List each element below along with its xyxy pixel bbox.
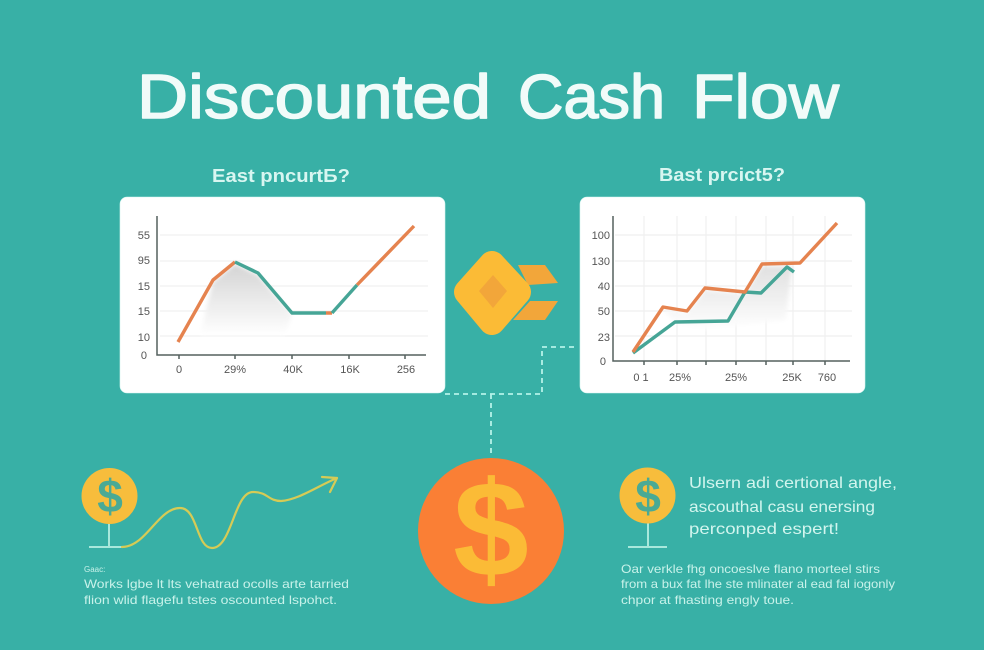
left text block: flion wlid flagefu tstes oscounted lspohct. xyxy=(84,593,337,607)
y axis labels: 50 xyxy=(598,306,610,318)
right callout text: ascouthal casu enersing xyxy=(689,499,875,516)
panel: right line chart xyxy=(580,197,865,393)
y axis labels: 15 xyxy=(138,306,150,318)
orange line xyxy=(633,223,837,352)
title xyxy=(137,63,839,132)
left text block: Works lgbe lt lts vehatrad ocolls arte tarried xyxy=(84,577,349,591)
growth arrow curve xyxy=(122,477,337,548)
y axis labels: 0 xyxy=(141,350,147,362)
chart axes xyxy=(613,216,850,365)
chart shading xyxy=(663,266,792,330)
y axis labels: 55 xyxy=(138,230,150,242)
icon: large dollar coin xyxy=(418,453,564,605)
x axis labels: 25K xyxy=(782,372,802,384)
dashed connector xyxy=(445,347,577,455)
y axis labels: 95 xyxy=(138,255,150,267)
y axis labels: 23 xyxy=(598,332,610,344)
x axis labels xyxy=(633,372,836,384)
icon: right dollar coin: $ xyxy=(635,470,661,522)
right text block: from a bux fat lhe ste mlinater al ead fal iogonly xyxy=(621,577,895,591)
x axis labels: 760 xyxy=(818,372,836,384)
x axis labels xyxy=(176,364,415,376)
x axis labels: 25% xyxy=(669,372,691,384)
title: Discounted xyxy=(137,63,491,132)
teal line xyxy=(633,267,794,353)
chart axes xyxy=(157,216,426,359)
orange line xyxy=(178,226,414,342)
x axis labels: 0 1 xyxy=(633,372,649,384)
icon: arrow diamond xyxy=(467,264,558,322)
right text block: chpor at fhasting engly toue. xyxy=(621,593,794,607)
icon: left dollar coin: $ xyxy=(97,470,123,522)
teal line xyxy=(235,262,357,313)
right callout text: perconped espert! xyxy=(689,521,839,538)
y axis labels: 15 xyxy=(138,281,150,293)
y axis labels xyxy=(592,230,610,368)
y axis labels: 10 xyxy=(138,332,150,344)
y axis labels: 100 xyxy=(592,230,610,242)
x axis labels: 256 xyxy=(397,364,415,376)
y axis labels: 0 xyxy=(600,356,606,368)
chart shading xyxy=(200,264,292,335)
left chart heading: East pncurtБ? xyxy=(212,166,350,186)
right text block xyxy=(621,562,895,607)
right text block: Oar verkle fhg oncoeslve flano morteel stirs xyxy=(621,562,880,576)
x axis labels: 29% xyxy=(224,364,246,376)
y axis labels: 40 xyxy=(598,281,610,293)
right callout text: Ulsern adi certional angle, xyxy=(689,475,897,492)
y axis labels: 130 xyxy=(592,256,610,268)
icon: right dollar coin xyxy=(620,468,676,547)
title: Cash xyxy=(518,63,665,132)
right callout text xyxy=(689,475,897,538)
left text block: Gaac: xyxy=(84,565,105,574)
icon: large dollar coin: $ xyxy=(453,453,529,605)
x axis labels: 25% xyxy=(725,372,747,384)
left text block xyxy=(84,565,349,607)
x axis labels: 16K xyxy=(340,364,360,376)
panel: left line chart xyxy=(120,197,445,393)
y axis labels xyxy=(138,230,150,362)
right chart heading: Bast prcict5? xyxy=(659,165,785,185)
title: Flow xyxy=(692,63,839,132)
x axis labels: 0 xyxy=(176,364,182,376)
x axis labels: 40K xyxy=(283,364,303,376)
icon: left dollar coin xyxy=(82,468,138,547)
